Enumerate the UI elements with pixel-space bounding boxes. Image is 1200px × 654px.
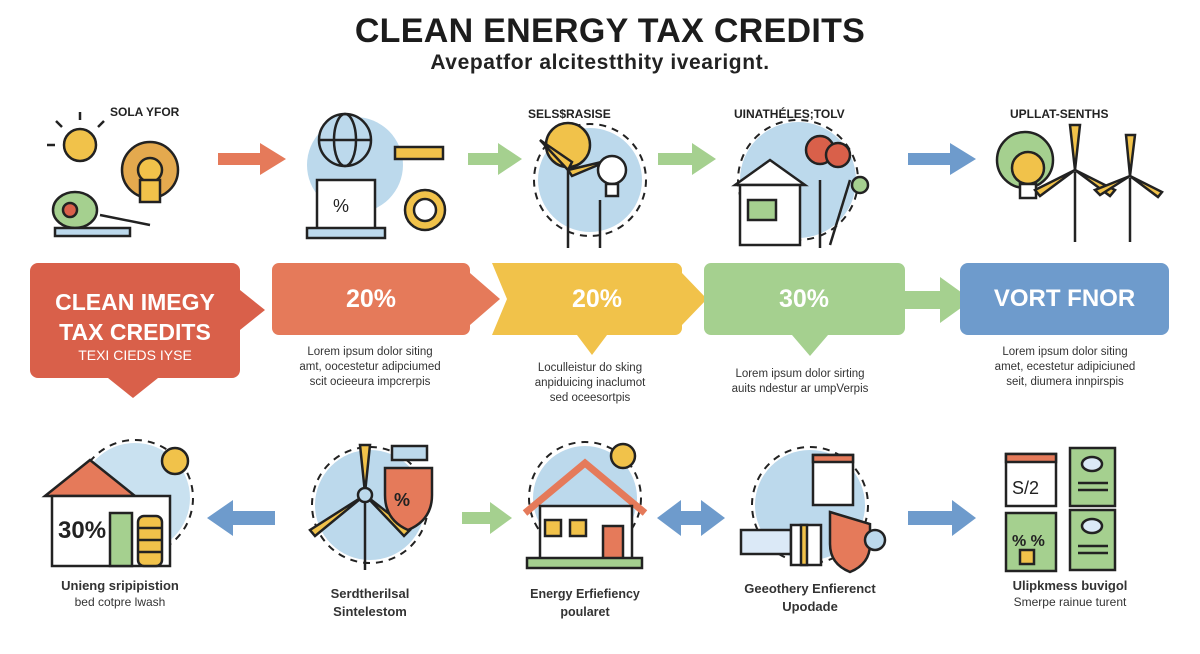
icon: bulb tree turbines — [996, 107, 1164, 242]
banner 1: clean energy — [30, 263, 265, 398]
icon: documents money — [1004, 446, 1116, 572]
banner 1: clean energy: CLEAN IMEGY — [55, 289, 215, 315]
label 5: Ulipkmess buvigol — [1013, 578, 1127, 593]
banner 4: 30% green — [704, 263, 960, 356]
banner 2: 20%: 20% — [346, 285, 396, 313]
banner 5: vort fnor: VORT FNOR — [994, 285, 1135, 312]
label 5: Smerpe rainue turent — [1014, 595, 1126, 609]
icon: bulb tree turbines: UPLLAT-SENTHS — [1010, 107, 1108, 121]
icon: house 30% — [42, 439, 194, 568]
icon: building cloud — [731, 106, 870, 248]
desc 4: auits ndestur ar umpVerpis — [732, 383, 868, 395]
icon: solar gear — [47, 105, 180, 238]
desc 2: scit ocieeura impcrerpis — [310, 376, 430, 388]
desc 4: Lorem ipsum dolor sirting — [735, 368, 865, 380]
icon: building cloud: UINATHÉLES;TOLV — [734, 106, 845, 121]
arrow 5 left — [207, 500, 275, 536]
banner 4: 30% green: 30% — [779, 285, 829, 313]
label 4 — [744, 581, 876, 614]
arrow 6 — [462, 502, 512, 534]
label 3 — [530, 587, 640, 619]
icon: house 30%: 30% — [58, 517, 106, 544]
label 4: Geeothery Enfierenct — [744, 581, 876, 596]
icon: documents money: S/2 — [1012, 478, 1039, 498]
arrow 3 — [658, 143, 716, 175]
label 2 — [331, 586, 409, 619]
banner 3: 20% yellow — [492, 263, 704, 355]
desc 3 — [535, 362, 646, 404]
subtitle: Avepatfor alcitestthity ivearignt. — [430, 51, 770, 74]
desc 2: amt, oocestetur adipciumed — [299, 361, 441, 373]
label 1 — [61, 578, 179, 609]
arrow 4 — [908, 143, 976, 175]
label 2: Sintelestom — [333, 604, 407, 619]
label 2: Serdtherilsal — [331, 586, 409, 601]
banner 1: clean energy: TEXI CIEDS IYSE — [78, 347, 192, 363]
desc 5: Lorem ipsum dolor siting — [1002, 346, 1128, 358]
label 1: Unieng sripipistion — [61, 578, 179, 593]
desc 3: Loculleistur do sking — [538, 362, 642, 374]
arrow 8 — [908, 500, 976, 536]
desc 2: Lorem ipsum dolor siting — [307, 346, 433, 358]
desc 2 — [299, 346, 441, 388]
arrow 7 double — [657, 500, 725, 536]
banner 2: 20% — [272, 263, 500, 335]
arrow 2 — [468, 143, 522, 175]
icon: turbine shield: % — [394, 490, 410, 510]
icon: globe laptop — [306, 112, 446, 240]
icon: wind turbine bulb — [528, 107, 647, 248]
title: CLEAN ENERGY TAX CREDITS — [355, 12, 865, 50]
desc 5: amet, ecestetur adipiciuned — [995, 361, 1135, 373]
desc 5 — [995, 346, 1135, 388]
banner 5: vort fnor — [960, 263, 1169, 335]
icon: wind turbine bulb: SELS$RASISE — [528, 107, 611, 121]
icon: turbine shield — [308, 444, 434, 570]
icon: globe laptop: % — [333, 196, 349, 216]
banner 1: clean energy: TAX CREDITS — [59, 319, 211, 345]
icon: house sun — [522, 441, 648, 570]
icon: document shield — [740, 446, 886, 574]
icon: solar gear: SOLA YFOR — [110, 105, 180, 119]
label 4: Upodade — [782, 599, 838, 614]
desc 3: anpiduicing inaclumot — [535, 377, 645, 389]
label 1: bed cotpre lwash — [75, 595, 165, 609]
label 3: poularet — [560, 605, 610, 619]
desc 5: seit, diumera innpirspis — [1006, 376, 1124, 388]
desc 3: sed oceesortpis — [550, 392, 630, 404]
label 3: Energy Erfiefiency — [530, 587, 640, 601]
desc 4 — [732, 368, 868, 395]
icon: documents money: % % — [1012, 533, 1045, 550]
banner 3: 20% yellow: 20% — [572, 285, 622, 313]
arrow 1 — [218, 143, 286, 175]
label 5 — [1013, 578, 1127, 609]
